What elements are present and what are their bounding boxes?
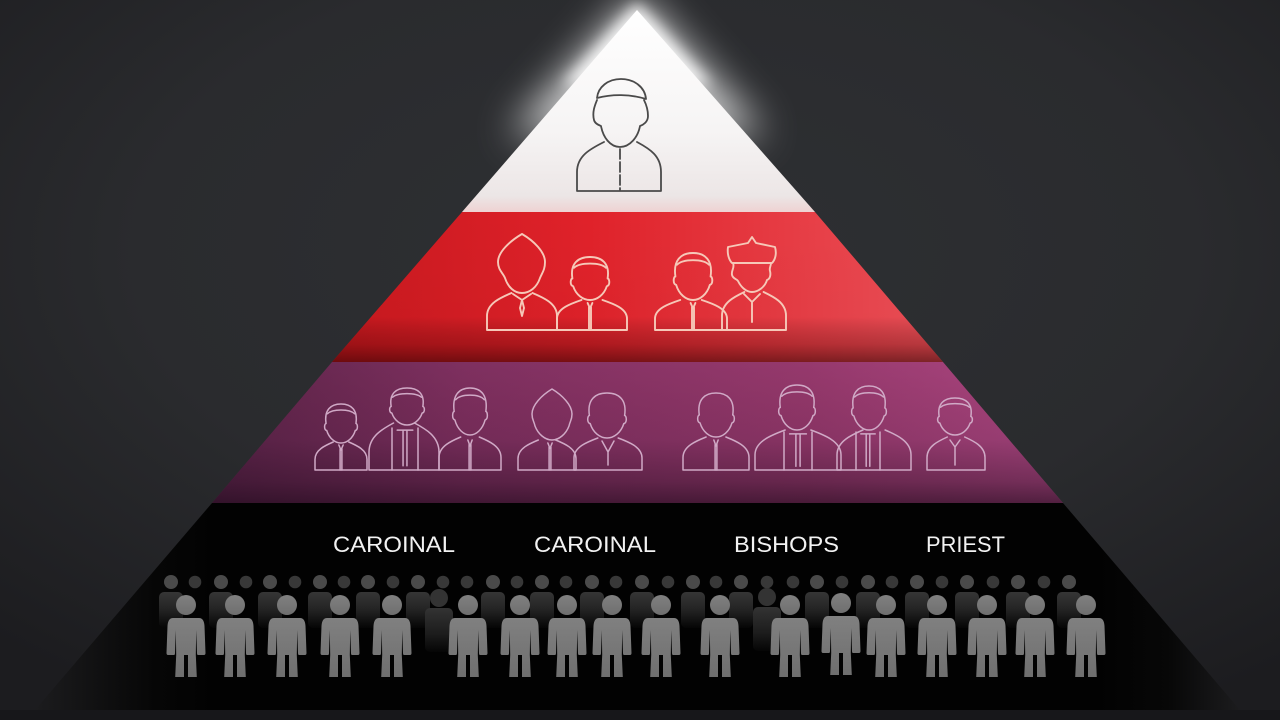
crowd: front row xyxy=(166,593,1106,677)
crowd: middle figures xyxy=(425,588,781,652)
label: cardinal 1: CAROINAL xyxy=(333,532,455,557)
crowd: back row xyxy=(159,575,1081,628)
icon: left clerics group xyxy=(315,388,501,470)
icon: cardinal with hat xyxy=(722,237,786,330)
panel: top tier xyxy=(462,10,815,212)
panel: red tier xyxy=(332,212,943,362)
icon: cleric xyxy=(557,257,627,330)
panel: purple tier xyxy=(212,362,1063,503)
label: cardinal 2: CAROINAL xyxy=(534,532,656,557)
icon: right clerics group xyxy=(683,385,985,470)
labels xyxy=(333,532,1005,557)
icon: pope xyxy=(577,79,661,191)
panel: black tier xyxy=(35,503,1240,710)
label: priest: PRIEST xyxy=(926,532,1005,557)
icon: cleric xyxy=(655,253,727,330)
apex glow xyxy=(509,0,765,135)
label: bishops: BISHOPS xyxy=(734,532,839,557)
icon: mitred bishop xyxy=(487,234,557,330)
bottom floor band xyxy=(0,710,1280,720)
icon: mitred pair xyxy=(518,389,642,470)
